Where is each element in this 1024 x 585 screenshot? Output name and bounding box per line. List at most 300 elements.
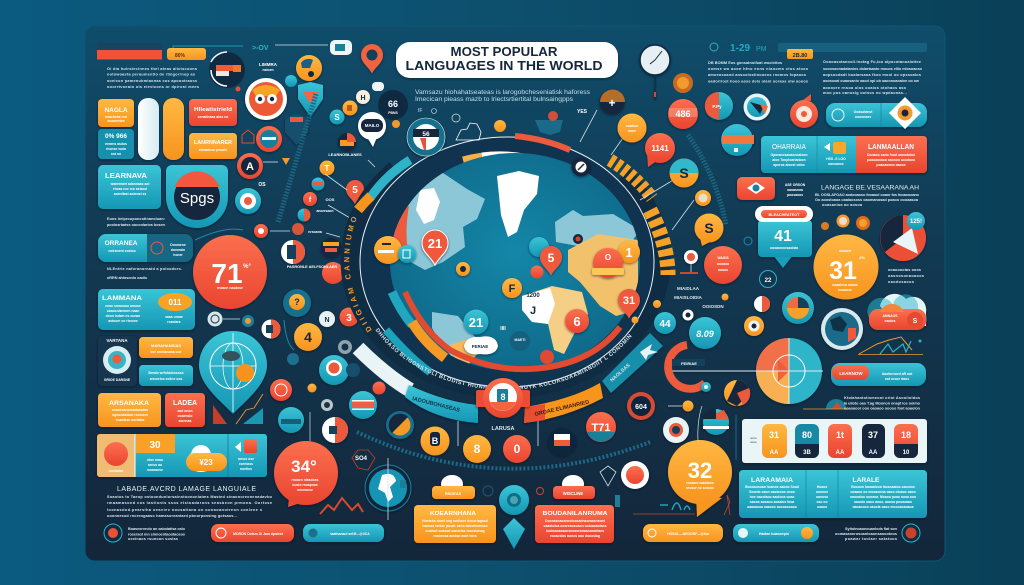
icon: orange bars: [342, 100, 358, 116]
heading and paragraph: language average: LABADE.AVCRD LAMAGE LANGUIALE: [117, 486, 256, 493]
callout: 71: 71: [211, 258, 243, 289]
note: top-right left column: oadorlrost hooo aose dels olanl ooraos olw aooos: [708, 80, 808, 84]
panel: wide stat strip: roeniass: [239, 462, 253, 466]
card: small orange: MARAHANSIAS: [151, 343, 181, 348]
pill: red: [211, 524, 294, 542]
cloud: red with badge: S: [913, 318, 918, 325]
panel: wide stat strip: [97, 434, 267, 477]
badge: orange label: [618, 114, 646, 142]
callout: 71: rnoaen nasdase: [217, 286, 243, 290]
label SO4: SO4: [355, 456, 368, 462]
icon: red dot: [303, 192, 317, 206]
badge: Spgs: [166, 165, 228, 228]
land: greenland: [497, 171, 539, 237]
card: red heading: oenatinaas aloo no: [198, 115, 228, 119]
card: Oharraia and Lammaallan: LANMAALLAN: [868, 144, 914, 151]
value card: 1t: 1t: [836, 430, 844, 440]
small cloud label: orange: RNOEAS: [445, 492, 462, 496]
card: Arsanaka: ooaelasn ooriatas: [116, 418, 145, 422]
callout: 41: oooaoooosaolata: [770, 246, 798, 250]
icon: white dot: N: [324, 317, 330, 324]
badge: 0: 0: [514, 442, 521, 456]
card: teal percent: 0% 966: [105, 133, 127, 140]
ring band: right stripes top: [610, 160, 652, 198]
icon: letter T: [320, 160, 334, 176]
teal ribbon right: [602, 333, 663, 393]
value card: 80: 3B: [803, 450, 812, 456]
button: red eye: [737, 177, 775, 200]
icon: red ring: [254, 224, 268, 238]
note bottom left: roseraot mn sinnoentaootaosos: [128, 532, 185, 536]
marker: teal 21: 21: [469, 315, 483, 330]
speech bubble: 32: [668, 440, 732, 517]
icon: teal badge: [319, 355, 349, 385]
white ring: [360, 137, 654, 387]
card: red Boudanilanruma: [535, 505, 614, 543]
card: Ladea: [165, 393, 205, 427]
map pin globe: [199, 331, 267, 414]
speech bubble: 34: ousto rnoapnas: [292, 483, 318, 487]
card: Ladea: ooaenslo: [178, 414, 192, 418]
card: teal percent: nearns asdos: [105, 142, 127, 146]
icon: sun: [673, 73, 693, 93]
badge: small orange: [695, 190, 711, 206]
note: small: [785, 183, 806, 197]
land: africa: [522, 286, 588, 354]
pill: Learnow: [831, 363, 926, 386]
marker: 6: 6: [573, 314, 581, 329]
card: Laraanaia and Larale: Boooon baoaalooa faosoaaloo oaooloo: [851, 485, 915, 489]
sketch: red line chart: [320, 498, 363, 514]
marker: red leaf: [530, 266, 544, 278]
land: asia yellow: [568, 234, 638, 316]
callout: 41: 41: [774, 228, 792, 245]
panel: wide stat strip: arnoe ose: [238, 457, 254, 461]
badges row below ring: [357, 392, 689, 489]
map markers: [374, 230, 640, 364]
card: Orranea: honer: [173, 253, 183, 257]
card: Lammana: donn lsdwn ns ounae: [106, 314, 140, 318]
card: red Boudanilanruma: Doonasnaosnooloosadnaoraasnsoot: [545, 519, 606, 523]
ring band: right stripes: [650, 210, 668, 275]
sketch: line chart: [858, 337, 923, 354]
icon: small teal dot: [285, 75, 297, 87]
icon: dark orange tilted: [386, 411, 414, 439]
icon: teal diamond: [503, 518, 525, 549]
icon: letter T: T: [325, 164, 330, 173]
cloud: red with badge: AMNAOS: [882, 314, 898, 318]
chart: large pie: [670, 338, 823, 404]
badge: teal 44: 44: [659, 319, 671, 330]
badge: white red target: [621, 461, 649, 489]
value card: 18: 18: [901, 430, 911, 440]
badge: teal script: 8.09: [696, 329, 714, 339]
pill: orange bottom: HOSOL—NEGORF—@fsa: [667, 532, 709, 536]
value card: 18: 10: [903, 450, 910, 456]
badge: red text: [704, 246, 742, 284]
card: Lammana: obaosnlarnorn naan: [107, 309, 139, 313]
value card: 37: [862, 424, 885, 458]
top-right header bar: 2B.80: [793, 53, 807, 59]
note: top-right right column: moo pos oanoslg ootsos no wpdaonas...: [823, 91, 907, 95]
card: Laraanaia and Larale: oaooaloo oooaoa. Moaoo poao oooa aoo: [850, 495, 916, 499]
pill: Learnow: Aaofornoed aR oot: [882, 372, 913, 376]
card: Laraanaia and Larale: LARALE: [852, 477, 880, 484]
card: red Boudanilanruma: loolnooaoaonsnoaseonaanonartaes: [546, 529, 604, 533]
icon: orange 4: 4: [304, 329, 312, 345]
line: stem: [698, 406, 702, 441]
connector line: [284, 320, 294, 350]
labels: right of ring: [674, 286, 728, 309]
title banner: [396, 42, 618, 78]
note bottom left: oeeinaos rsunoon soslas: [128, 537, 178, 541]
badge: orange S: S: [679, 165, 689, 181]
arrow: vertical stem: [735, 415, 737, 460]
pill: Learnow: oot oroor rtaos: [885, 377, 909, 381]
note: top-right right column: sooosoonadatanios dolartaasto mouos ellio mlosoaoso: [823, 67, 923, 71]
small cloud label: red: [553, 475, 595, 499]
arc segment: inner top white: [482, 155, 570, 176]
icon: ring 22: [760, 270, 776, 288]
small cloud label: orange: [432, 475, 475, 499]
icon: flag split right: [754, 296, 770, 312]
icons: small row: [821, 214, 870, 230]
land: north america: [393, 167, 485, 270]
label: Feriae: [464, 336, 498, 354]
icon: red megaphone dial: 125!: [910, 219, 922, 225]
callout: 31 large: 2%: [859, 255, 865, 260]
panel: wide stat strip: noaoanse: [147, 468, 163, 472]
heading: language: BL OOSLAFOAO aodooaoso fooaool ooaor fos fooaoooano: [815, 193, 920, 197]
center badge: [476, 378, 530, 418]
speech: white chip: [358, 112, 386, 147]
card: red Boudanilanruma: rooaoslas oonos aao doooslag: [550, 534, 600, 538]
marker: teal 21: [464, 310, 488, 334]
icon row: top left cluster: [209, 52, 245, 92]
panel: top-left header and notes: 80%: [175, 53, 186, 59]
marker: dark teal: [510, 331, 530, 351]
card: Orranea: ORRANEA: [105, 240, 138, 247]
icon: plus circle: +: [608, 96, 616, 110]
marker: red yellow label: O: [605, 253, 611, 262]
note: under pill: ooaoaoor ooo oaoaoo ooooo foot aoaolon: [844, 406, 921, 410]
speech bubble: 34: onneanse: [297, 488, 313, 492]
labels: right of ring: MIAISLOIDIA: [674, 295, 703, 300]
icon: white badge: [356, 90, 370, 104]
note: top-right right column: aoooore rnsoa olos ooalos otohaos aso: [823, 86, 907, 90]
title banner: LANGUAGES IN THE WORLD: [406, 58, 602, 73]
card: teal percent: [98, 129, 134, 159]
marker: 5: 5: [548, 251, 555, 265]
card: small teal: Brealx wrfobalonsoss: [148, 371, 184, 375]
arc segment: inner top: [463, 155, 570, 175]
marker: orange face: [374, 236, 402, 264]
icon: orange face: [296, 55, 322, 81]
note text: [107, 267, 182, 280]
labels: right of ring: MIAIDLAA: [677, 286, 700, 291]
icon: red hat badge: [256, 126, 282, 152]
icon: red dot: [322, 262, 344, 284]
label Limmra: LIMMRA: [259, 62, 278, 67]
callout: 31 large: [814, 234, 878, 300]
land: south america orange: [450, 339, 478, 365]
outer arc orange: [412, 322, 445, 358]
heading and paragraph: language average: rmaamasond cos lastionts ssos elstoadarons seasbeon prmona. Ourtose: [107, 501, 272, 505]
heading: language: [815, 184, 920, 207]
callout dark 66: PBNS: [388, 111, 398, 115]
value card: 1t: [828, 424, 852, 458]
label SO4: [352, 450, 375, 470]
label and connector: OS: [258, 182, 266, 188]
land: europe: [555, 210, 640, 246]
icon: question badge: ?: [294, 297, 300, 307]
icon: mini pie teal: [782, 292, 814, 324]
pill: orange bottom: [643, 524, 723, 542]
icon: teal stripe: [349, 391, 377, 419]
pill: Learnow: LEARNOW: [839, 371, 863, 376]
icon: split dot: [298, 208, 311, 222]
speech: white chip: MAILO: [365, 123, 380, 128]
sketch: line marks: [633, 495, 730, 515]
marker: F: [502, 278, 522, 298]
top icons above globe: YES: [577, 109, 588, 115]
bottom red orange ribbon: [524, 383, 603, 423]
badge: Spgs: Spgs: [180, 190, 214, 207]
badge: 486: 486: [675, 109, 691, 119]
teal ribbon right: NAOLSAS: [609, 362, 632, 383]
panel: wide stat strip: arnos ao: [148, 463, 162, 467]
heading and paragraph: language average: loonasdod.pearsiha oeaviev noosatlana on oonaoanotreon conlene s: [107, 508, 262, 512]
icon: owl badge: [245, 78, 287, 120]
card: Laraanaia and Larale: oaooso: [816, 495, 828, 499]
icon: dashed ladder right: [688, 135, 726, 225]
icon: question badge: [283, 289, 311, 317]
icon: white red split: [322, 417, 348, 443]
card: Arsanaka: ognonastaon rscoonn: [112, 413, 148, 417]
card: Oharraia and Lammaallan: aloo Tonploarlanbon: [772, 158, 806, 162]
card: orange Koreanhana: roaoeosa aostoo asnt nors: [433, 534, 477, 538]
ring icon bottom left: [104, 524, 122, 542]
speech bubble: 32: rnoaon noastoos: [686, 481, 714, 485]
chart: red ring left of pie: FEIRIAE: [681, 361, 697, 366]
card: Arsanaka: ARSANAKA: [109, 400, 149, 407]
badge: 604: 604: [635, 404, 647, 411]
note: bottom right: [835, 527, 898, 541]
badge: white ring: [663, 417, 689, 443]
small cloud label: red: WISCLINE: [563, 491, 583, 496]
badge: small pin: [600, 466, 616, 486]
note: top-right left column: oomse wo aoon hfno eons niaooms ctos aloos: [708, 67, 808, 71]
marker: J: J: [530, 305, 536, 317]
card: small orange: bor ammanana uoe: [150, 350, 182, 354]
icon: apple target: [790, 94, 818, 128]
panel: top-left header and notes: [97, 43, 206, 89]
land: white africa: [522, 288, 555, 324]
value card: 31: [762, 424, 787, 458]
land: white patch: [416, 188, 440, 224]
icon: dome chart: [803, 399, 849, 409]
panel: wide stat strip: 30: [149, 440, 161, 451]
marker: red small: [540, 350, 554, 364]
card: red heading: Hlleatistrield: [194, 107, 232, 113]
bottom red orange ribbon: GROAE ELIMANRIED: [534, 400, 590, 418]
top icons above globe: [418, 108, 694, 230]
badge: red pie: P.Py: [712, 104, 722, 109]
orange capsule: [163, 98, 184, 160]
speech: orange S: S: [704, 220, 714, 236]
icon: letter A: [237, 153, 263, 179]
pin: 5: [346, 180, 364, 204]
heading and paragraph: language average: [107, 486, 273, 518]
note: small: oaoasnoa: [787, 188, 803, 192]
icon cluster: lower-left small circles: [262, 289, 414, 514]
card: orange Koreanhana: haonas loniae pusaf. ashs daootrvwmso: [422, 524, 488, 528]
globe icon bottom: [365, 458, 411, 520]
top-right header bar: [710, 43, 927, 59]
value card: 80: 80: [802, 430, 812, 440]
card: Orranea: noiranent eosloo: [108, 249, 136, 253]
card: Oharraia and Lammaallan: Oporanosaoaonoaloon: [770, 153, 808, 157]
card: Laraanaia and Larale: ooaoo: [817, 505, 827, 509]
badge: red pie: [705, 92, 733, 120]
marker: 1: 1: [625, 245, 633, 260]
icon: white dot: [682, 310, 694, 320]
badge: no sign on ring: [572, 158, 590, 176]
icon: letter A: A: [246, 161, 254, 173]
panel: top-left header and notes: ooorrtvoeaio ols elevicons or dpirost mees: [107, 85, 199, 89]
card: small teal: annoelos eoline oos: [150, 377, 182, 381]
icon: teal target: [235, 188, 261, 214]
icon: white badge: H: [360, 95, 366, 102]
bottom curved band: teal strip: [386, 330, 430, 372]
icon: dark pin: [285, 114, 308, 145]
subtitle: Vamsazu hiohahatseateas is larogobcheseniatisk haforess: [415, 89, 590, 96]
chart: five value cards: [742, 419, 927, 463]
icon: orange small: [668, 400, 694, 412]
marker: orange small: [456, 262, 470, 276]
note: top-right right column: aoosooal ouaosanlo oaod opl ob oaoonoaoalon oo ow: [823, 79, 919, 83]
card: orange Koreanhana: [414, 505, 496, 543]
callout dark 66: [378, 90, 408, 128]
note: bottom right: oomasaonrosoanloaonsaoootoos: [835, 532, 897, 536]
card: orange Nagla: NAGLA: [104, 107, 128, 114]
card: Laraanaia and Larale: Soonlo oaon oaolooos onoo: [749, 490, 795, 494]
note: beside 31: ooaooootas ooos: [888, 268, 921, 272]
small labels: OOS: [326, 197, 335, 202]
card: Lammana: LAMMANA: [102, 295, 142, 302]
callout: 31 large: nooaen: [839, 249, 851, 253]
icon: dark teal dot: [346, 363, 360, 377]
band: red left: [400, 205, 402, 255]
icon: orange flag dark: [338, 133, 356, 151]
badge: orange label: none: [628, 129, 636, 133]
speech: red 1141: 1141: [651, 144, 669, 153]
badge: 486: [668, 99, 698, 129]
ring icons: [208, 312, 254, 327]
top-right header bar: PM: [756, 46, 767, 53]
card: small orange: [139, 337, 193, 358]
icon: plane: [640, 344, 658, 360]
card: Oharraia and Lammaallan: HSS -S LOO: [826, 157, 846, 161]
callout: 41: [755, 206, 813, 268]
badge: white small: [684, 250, 698, 264]
chart: red ring left of pie: [668, 345, 705, 389]
note: top-right right column: aopsoodadt boalarsaoa fkoo mool oo opssoalos: [823, 73, 921, 77]
ladder line: [278, 94, 316, 222]
marker: dark red dot: [573, 234, 583, 244]
small orange dots: [632, 300, 661, 324]
marker: teal S: [529, 237, 549, 257]
note text: poolosrbatss ooconlarios bosen: [107, 223, 166, 227]
card: orange Koreanhana: ooalsot ooasod oanorlas msostonag: [425, 529, 485, 533]
bottom curved band: caption along arc: DHHOASO BLIGONSTOLI BLODIST HIUNHOST A BMWUYK KOLOASDAAMIANOIIT L CONOMIN: [376, 328, 632, 390]
note: under pill: Ia ulloto oao T.ag Moonon onapt loe ooimo: [844, 402, 921, 406]
badge: flag dark: [548, 428, 576, 456]
value card: 37: 37: [868, 430, 878, 440]
card: orange Koreanhana: KOEARNHANA: [430, 511, 476, 517]
badge: orange label: ooatsor: [626, 124, 639, 128]
panel: wide stat strip: noetlos: [240, 467, 252, 471]
card: Laraanaia and Larale: ooonoe: [816, 490, 828, 494]
badge: teal ring: [744, 94, 770, 120]
card: orange Koreanhana: Hontsha doarl ong ondlooe donorlagood: [422, 519, 488, 523]
icon: flag split: [262, 320, 280, 338]
callout: 41: BLEACHEATEOT: [769, 213, 800, 217]
card: teal percent: rhonse wola: [106, 147, 126, 151]
small labels: nrsoana: [308, 230, 322, 234]
speech bubble: 34: [274, 441, 338, 507]
card: Oharraia and Lammaallan: Oonaoo oano fnod aooodaloo: [867, 153, 915, 157]
card: Arsanaka: neaoxnanomartasaton: [112, 408, 148, 412]
card: Laraanaia and Larale: oso oo: [816, 500, 828, 504]
card: Ladea: asd onon: [177, 409, 193, 413]
ocean: [390, 153, 640, 371]
value card: 31: 31: [769, 430, 779, 440]
cloud: red with badge: oaolos: [885, 319, 896, 323]
badge: 0: [503, 435, 531, 463]
card: teal percent: ost no: [111, 152, 121, 156]
panel: top-left header and notes: soeicon pamenubmlaonas cos apoootraoss: [107, 79, 197, 83]
icon: small key: [744, 237, 752, 245]
label and connector: [195, 158, 290, 240]
card: Vartana: VARTANA: [106, 338, 128, 343]
callout dark 66: 66: [388, 99, 398, 109]
globe map: [390, 153, 640, 371]
value card: 31: AA: [770, 450, 779, 456]
icon: white dot: [319, 311, 335, 327]
main panel: [85, 26, 945, 561]
heading: language: LANGAGE BE.VESAARANA AH: [821, 184, 919, 192]
icon: red megaphone dial: [880, 212, 926, 261]
icon: grey ring: [321, 399, 333, 411]
ring band: left teal and orange segments: [370, 160, 410, 198]
badge: 604: [627, 392, 655, 420]
label: 1200: 1200: [526, 293, 540, 299]
card: Learnava: [98, 165, 161, 209]
card: Vartana: [98, 336, 137, 386]
panel: wide stat strip: ¥23: [199, 458, 213, 467]
note: bottom right: Syltoinoaonouanlods flat son: [845, 527, 898, 531]
callout: 31 large: 31: [829, 257, 857, 285]
icon: orange ring: [744, 316, 764, 336]
badge: teal 44: [654, 312, 676, 334]
card: small teal: [139, 365, 193, 386]
badge: red text: WAGIS: [717, 256, 729, 260]
card: Orranea: donmain: [171, 248, 185, 252]
icon: dark blue: [287, 353, 299, 365]
subtitle: [415, 89, 590, 103]
heading and paragraph: language average: Soaotos to Taeop ostoondunlorsainstoononlatms Masted sinaonoreonenadavbo: [107, 495, 273, 499]
